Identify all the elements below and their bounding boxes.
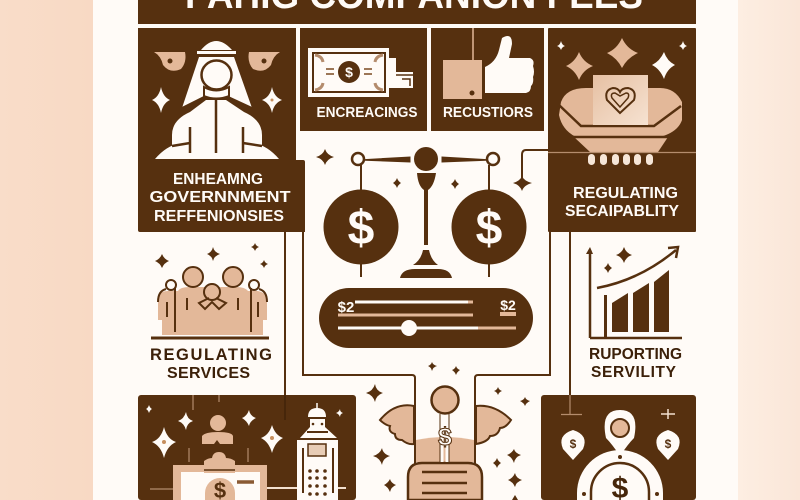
label: regulating services: SERVICES xyxy=(167,365,250,382)
icon: right pin: $ xyxy=(665,437,672,451)
slider pill xyxy=(319,288,533,348)
icon: right pin xyxy=(656,430,680,460)
label: recustiors: RECUSTIORS xyxy=(443,105,533,121)
icon: pegs xyxy=(588,154,653,165)
right pan xyxy=(452,190,526,264)
label: regulating services xyxy=(150,346,272,382)
icon: winged jar xyxy=(366,362,530,500)
label: regulating secapability xyxy=(565,185,679,220)
label: ruporting servility: RUPORTING xyxy=(589,346,682,363)
icon: sparkles xyxy=(557,38,687,80)
icon: person xyxy=(202,415,233,444)
label: encreasing: ENCREACINGS xyxy=(316,105,418,121)
label: government: ENHEAMNG xyxy=(173,171,263,188)
panel: encreasing xyxy=(300,28,427,131)
divider line xyxy=(548,152,696,154)
icon: banknote: $ xyxy=(345,64,353,80)
sparkles xyxy=(366,362,530,500)
title bar xyxy=(138,0,696,24)
base xyxy=(400,250,452,278)
label: government: REFFENIONSIES xyxy=(154,208,284,225)
icon: box with cord xyxy=(443,28,482,99)
label: ruporting servility xyxy=(589,346,682,381)
icon: plus xyxy=(661,409,675,419)
panel: bottom right xyxy=(541,395,696,500)
chart: growth bars xyxy=(586,247,682,338)
slider right value: $2 xyxy=(500,297,516,313)
chart: balance scale xyxy=(316,147,526,278)
panel: regulating secapability xyxy=(548,28,696,232)
label: regulating services: REGULATING xyxy=(150,346,272,364)
label: regulating secapability: REGULATING xyxy=(573,185,678,202)
icon: building xyxy=(297,403,338,500)
icon: clipboard xyxy=(150,448,346,500)
icon: sparkles xyxy=(152,87,282,113)
icon: thumbs up xyxy=(485,36,534,93)
label: government xyxy=(150,171,291,225)
panel: government xyxy=(138,28,305,232)
label: ruporting servility: SERVILITY xyxy=(591,364,677,381)
icon: winged jar: $ xyxy=(438,423,452,451)
icon: left ornament xyxy=(154,52,186,71)
icon group: regulating services people xyxy=(151,243,269,338)
icon: left pin: $ xyxy=(570,437,577,451)
sparkles xyxy=(146,405,343,458)
icon: arrow star on connector xyxy=(513,176,532,191)
label: regulating secapability: SECAIPABLITY xyxy=(565,203,679,220)
panel: recustiors xyxy=(431,28,544,131)
left pan xyxy=(324,190,398,264)
icon: left pin xyxy=(561,430,585,460)
label: government: GOVERNNMENT xyxy=(150,189,291,206)
icon: tray with heart card xyxy=(559,75,682,152)
icon: right ornament xyxy=(248,52,280,71)
slider left value: $2 xyxy=(338,299,354,316)
chart: balance scale: $ xyxy=(348,202,375,255)
sparkles xyxy=(155,243,268,268)
left wing xyxy=(380,405,414,444)
icon: person in headdress xyxy=(155,41,279,159)
icon: large pin and coin xyxy=(577,410,663,500)
connector lines xyxy=(285,150,570,500)
panel: bottom left xyxy=(138,395,356,500)
right wing xyxy=(476,406,511,444)
chart: balance scale: $ xyxy=(476,202,503,255)
